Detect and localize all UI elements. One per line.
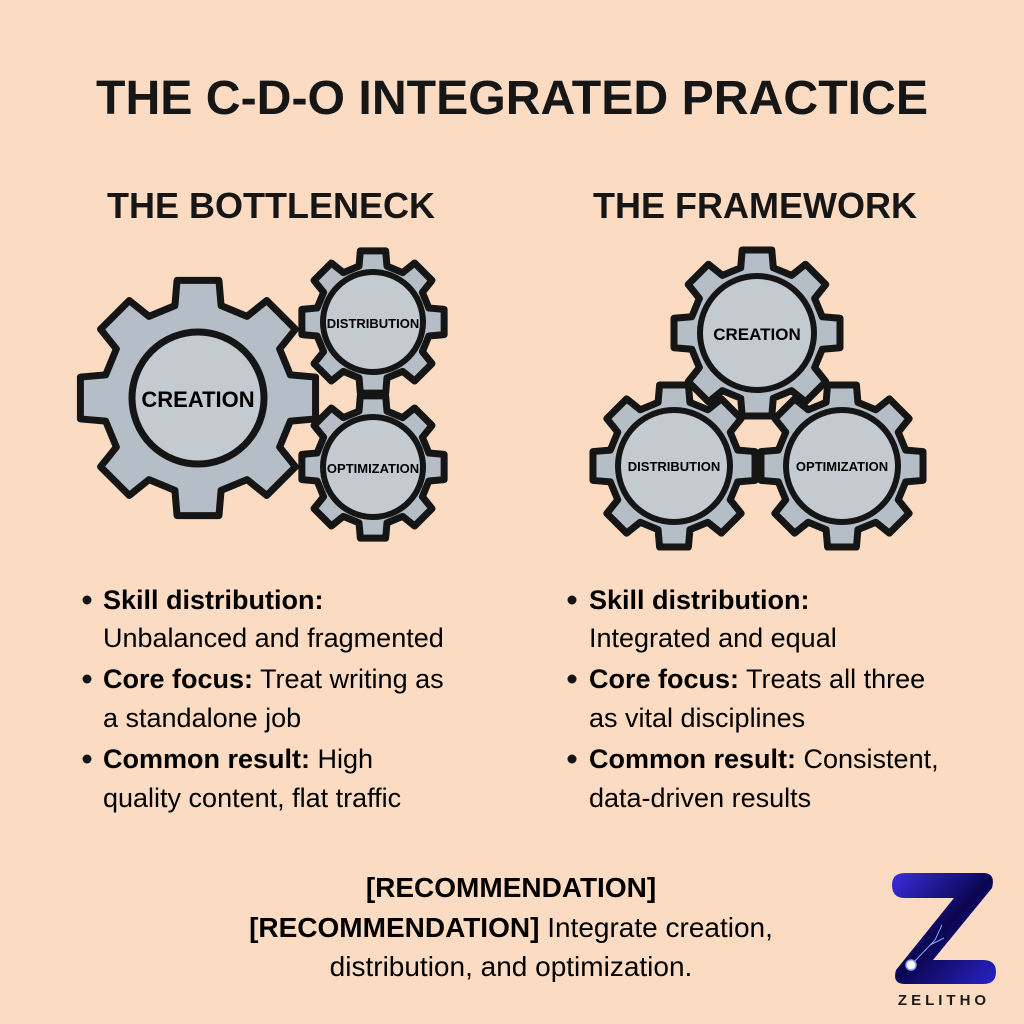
recommendation text — [249, 872, 773, 982]
bullets: framework: data-driven results — [589, 783, 811, 813]
bullets: framework: Integrated and equal — [589, 623, 837, 653]
gear: distribution small: DISTRIBUTION — [327, 316, 419, 331]
gear: optimization — [761, 385, 923, 547]
bullets: bottleneck: Skill distribution: — [103, 585, 324, 615]
recommendation text: [RECOMMENDATION] Integrate creation, — [249, 912, 773, 943]
bullets: bottleneck: quality content, flat traffic — [103, 783, 401, 813]
gear: creation large — [80, 280, 316, 516]
bullets: framework: as vital disciplines — [589, 703, 805, 733]
bullets: bottleneck: Core focus: Treat writing as — [103, 664, 444, 694]
gear: creation: CREATION — [713, 325, 801, 344]
bullets: framework — [568, 585, 939, 813]
bullets: framework: Core focus: Treats all three — [589, 664, 925, 694]
title: THE C-D-O INTEGRATED PRACTICE — [96, 72, 928, 125]
bullets: bottleneck: Common result: High — [103, 744, 373, 774]
gear: distribution small — [302, 251, 444, 393]
gear: optimization: OPTIMIZATION — [796, 459, 888, 474]
bullets: framework: Common result: Consistent, — [589, 744, 939, 774]
recommendation text: distribution, and optimization. — [330, 951, 692, 982]
recommendation text: [RECOMMENDATION] — [366, 872, 656, 903]
heading: the framework: THE FRAMEWORK — [593, 185, 917, 226]
logo: zelitho: ZELITHO — [898, 992, 990, 1009]
bullets: bottleneck: a standalone job — [103, 703, 301, 733]
heading: the bottleneck: THE BOTTLENECK — [107, 185, 435, 226]
bullets: bottleneck — [82, 585, 444, 813]
bullets: framework: Skill distribution: — [589, 585, 810, 615]
gear: optimization small — [302, 396, 444, 538]
gears: framework — [593, 250, 923, 547]
gears: bottleneck — [80, 251, 444, 538]
bullets: bottleneck: Unbalanced and fragmented — [103, 623, 444, 653]
gear: optimization small: OPTIMIZATION — [327, 461, 419, 476]
logo: zelitho — [892, 873, 996, 1009]
gear: creation large: CREATION — [141, 387, 255, 412]
gear: creation — [674, 250, 840, 416]
gear: distribution: DISTRIBUTION — [628, 459, 720, 474]
gear: distribution — [593, 385, 755, 547]
